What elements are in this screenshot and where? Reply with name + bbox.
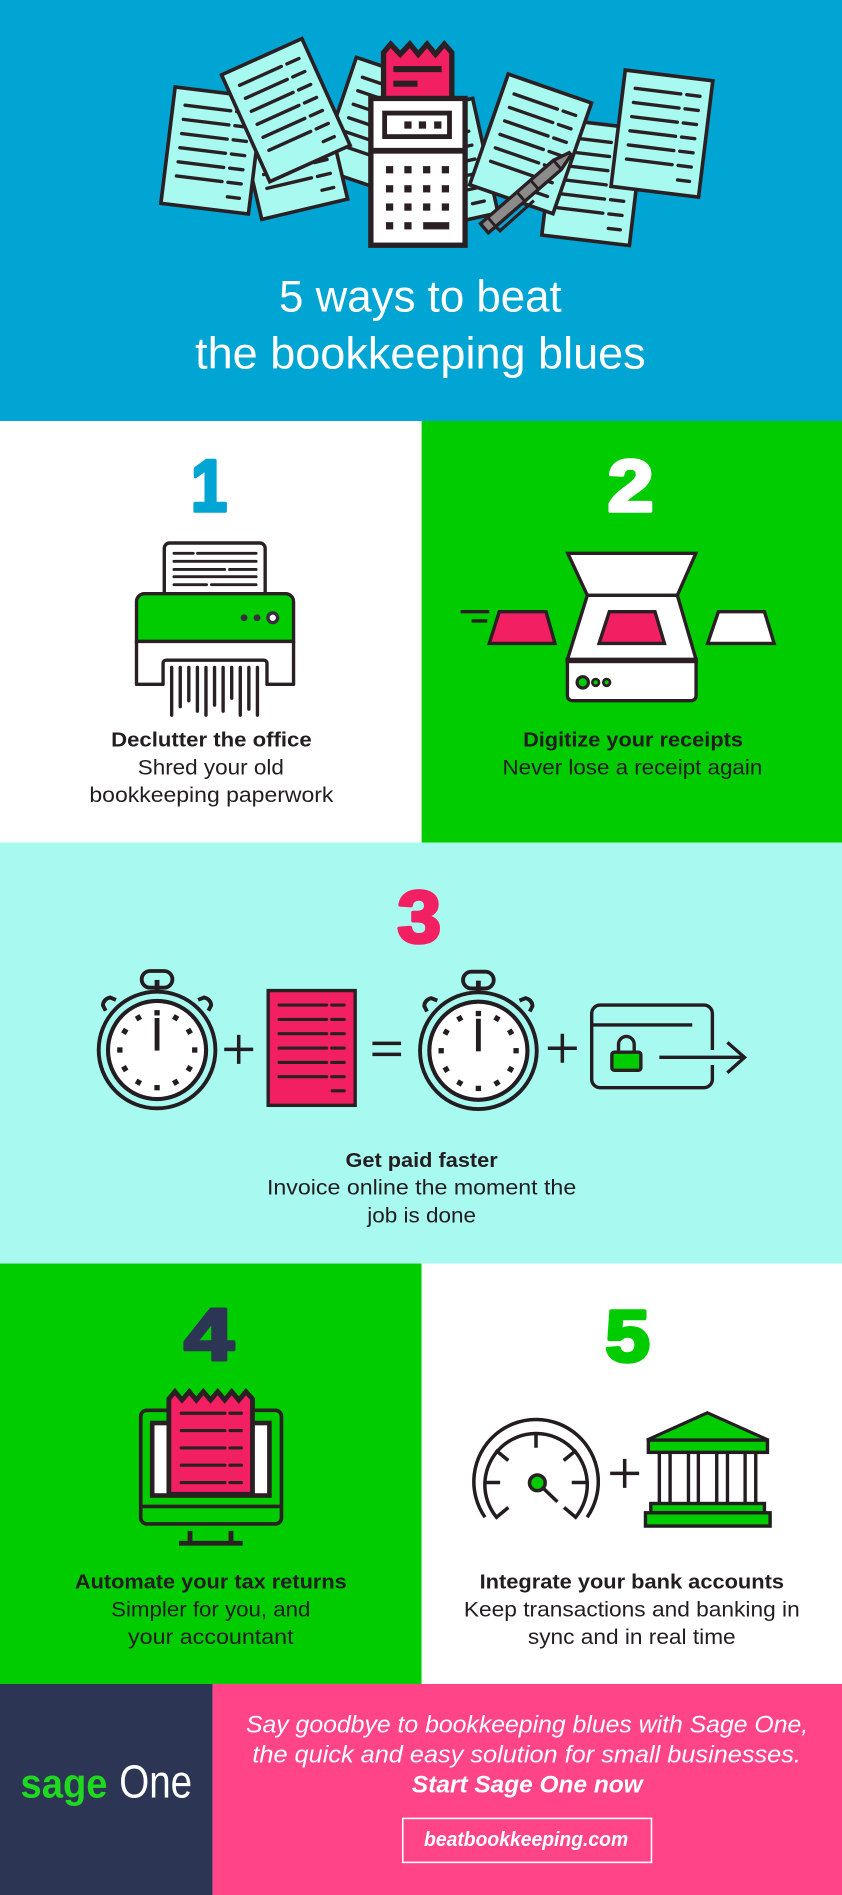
step 3 text: [267, 1149, 576, 1228]
icon: invoice: [268, 991, 355, 1105]
paper stack: [161, 39, 713, 246]
step 5 text: Integrate your bank accounts: [480, 1571, 784, 1594]
logo: sage One: sage: [21, 1761, 108, 1807]
logo: sage One: One: [119, 1756, 192, 1808]
plus sign: [224, 1035, 253, 1064]
button: beatbookkeeping.com: [403, 1818, 651, 1862]
plus sign 2: [548, 1034, 577, 1063]
number 1: 1: [191, 444, 227, 527]
icon: paper shredder: [137, 543, 294, 715]
title: the bookkeeping blues: [195, 329, 646, 378]
icon: speedometer: [474, 1419, 598, 1517]
number 5: 5: [605, 1294, 650, 1377]
step 3 text: job is done: [366, 1205, 476, 1228]
illustration: scattered paperwork, calculator and pen: [161, 39, 713, 246]
step 2 text: Never lose a receipt again: [503, 756, 762, 779]
step 4 text: your accountant: [128, 1626, 294, 1649]
panel: step 1 declutter: [0, 421, 422, 843]
icon: calculator: [368, 98, 468, 245]
step 1 text: Declutter the office: [111, 729, 312, 752]
title: 5 ways to beat: [279, 273, 562, 322]
number 4: 4: [184, 1293, 234, 1376]
panel: step 4 automate: [0, 1264, 422, 1684]
step 3 text: Invoice online the moment the: [267, 1177, 576, 1200]
call to action text: the quick and easy solution for small businesses.: [252, 1742, 801, 1769]
panel: footer call to action: [213, 1684, 842, 1895]
icon: scanned blank receipt: [708, 612, 774, 643]
call to action text: Say goodbye to bookkeeping blues with Sage One,: [246, 1712, 808, 1739]
step 2 text: Digitize your receipts: [523, 729, 743, 752]
number 3: 3: [397, 875, 441, 958]
plus sign 3: [610, 1459, 639, 1488]
button: beatbookkeeping.com: beatbookkeeping.com: [424, 1829, 628, 1851]
step 1 text: Shred your old: [138, 756, 284, 779]
step 3 text: Get paid faster: [345, 1149, 498, 1172]
step 4 text: Simpler for you, and: [111, 1598, 310, 1621]
icon: secure card payment: [592, 1005, 745, 1088]
step 4 text: [75, 1571, 347, 1649]
logo: sage One: [21, 1756, 192, 1808]
panel: step 5 integrate: [422, 1264, 842, 1684]
icon: bank building: [645, 1413, 770, 1526]
panel: footer logo: [0, 1684, 213, 1895]
step 1 text: [89, 729, 334, 807]
step 1 text: bookkeeping paperwork: [89, 784, 334, 807]
call to action text: [246, 1712, 808, 1799]
icon: stopwatch 2: [420, 972, 537, 1109]
icon: stopwatch: [99, 971, 215, 1108]
step 4 text: Automate your tax returns: [75, 1571, 347, 1594]
step 2 text: [503, 729, 762, 779]
icon: pen: [480, 149, 574, 233]
panel: header: [0, 0, 842, 421]
step 5 text: Keep transactions and banking in: [464, 1598, 800, 1621]
icon: monitor with receipt: [141, 1392, 281, 1543]
icon: scanner: [566, 553, 698, 701]
step 5 text: sync and in real time: [528, 1626, 736, 1649]
panel: step 3 get paid faster: [0, 843, 842, 1264]
panel: step 2 digitize: [422, 421, 842, 843]
step 5 text: [464, 1571, 800, 1649]
equals sign: [372, 1043, 401, 1054]
title: [195, 273, 646, 378]
icon: receipt: [384, 44, 452, 99]
call to action text: Start Sage One now: [412, 1772, 645, 1799]
number 2: 2: [608, 444, 654, 527]
icon: receipt entering scanner: [461, 612, 555, 643]
